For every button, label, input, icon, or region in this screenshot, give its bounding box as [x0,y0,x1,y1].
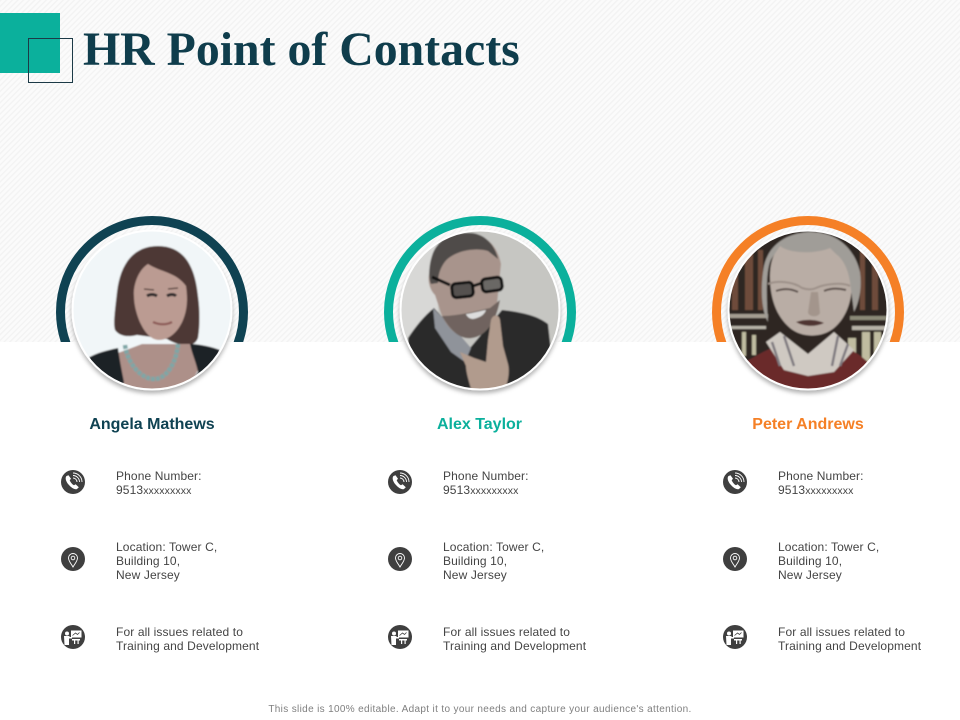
portrait: Alex Taylor [398,228,562,394]
text: location: Location: Tower C, [443,540,544,554]
footer note: This slide is 100% editable. Adapt it to your needs and capture your audience's attention. [268,704,692,715]
icon: training [61,625,85,649]
text: phone number: Phone Number: [116,469,202,483]
name: Peter Andrews [752,416,864,433]
portrait: Angela Mathews [70,228,234,394]
text: phone number: Phone Number: [443,469,529,483]
text: training: Training and Development [778,639,922,653]
text: training: Training and Development [443,639,587,653]
name: Alex Taylor [437,416,522,433]
icon: phone [61,470,85,494]
text: location: Location: Tower C, [778,540,879,554]
text: phone number: 9513xxxxxxxxx [116,483,192,497]
text: location: New Jersey [778,568,842,582]
logo: teal square with outlined square [0,13,72,82]
text: training: For all issues related to [116,625,243,639]
icon: training [388,625,412,649]
text: phone number: Phone Number: [778,469,864,483]
text: location: New Jersey [116,568,180,582]
icon: phone [723,470,747,494]
text: training: Training and Development [116,639,260,653]
ring: navy arc [56,216,248,342]
hatched background band [0,0,960,342]
panel: Angela Mathews [60,220,260,653]
text: phone number: 9513xxxxxxxxx [443,483,519,497]
text: location: Building 10, [116,554,180,568]
panel: Peter Andrews [716,220,922,653]
panel: Alex Taylor [388,220,587,653]
icon: phone [388,470,412,494]
text: location: Building 10, [443,554,507,568]
icon: location pin [388,547,412,571]
ring: teal arc [384,216,576,342]
text: phone number: 9513xxxxxxxxx [778,483,854,497]
name: Angela Mathews [89,416,215,433]
portrait: Peter Andrews [726,228,890,396]
icon: location pin [61,547,85,571]
text: location: Location: Tower C, [116,540,217,554]
text: location: Building 10, [778,554,842,568]
icon: training [723,625,747,649]
icon: location pin [723,547,747,571]
text: training: For all issues related to [778,625,905,639]
ring: orange arc [712,216,904,342]
text: location: New Jersey [443,568,507,582]
title: HR Point of Contacts [83,23,520,76]
text: training: For all issues related to [443,625,570,639]
